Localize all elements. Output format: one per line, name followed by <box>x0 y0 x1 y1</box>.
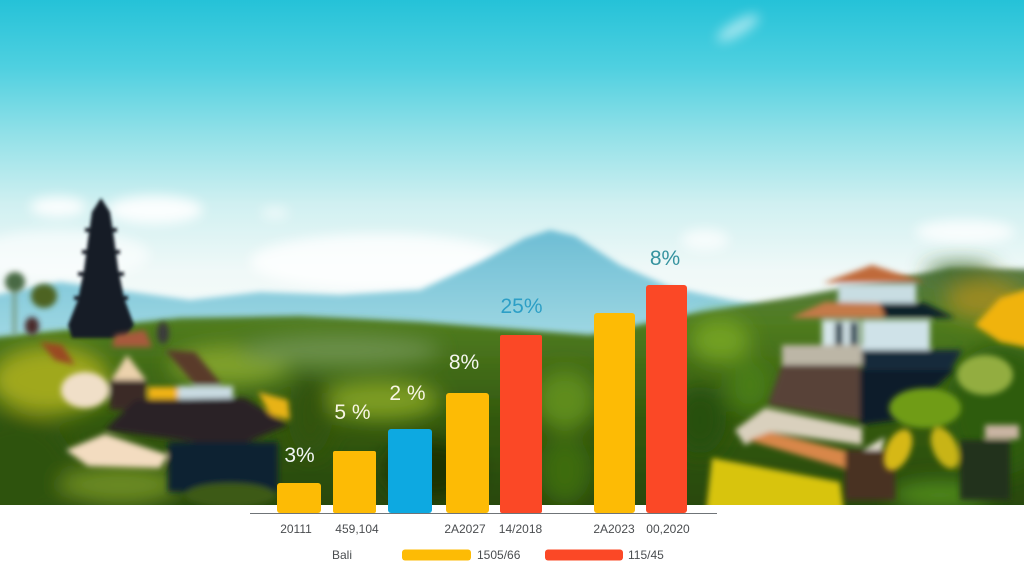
bar 4 yellow <box>446 393 489 513</box>
distant mountains <box>0 226 761 340</box>
axis label 459,104: 459,104 <box>335 522 379 536</box>
palm trees left <box>5 272 169 344</box>
pagoda tower <box>68 198 134 338</box>
bar 1 yellow <box>277 483 321 513</box>
bar chart <box>250 247 717 536</box>
axis label 00,2020: 00,2020 <box>646 522 690 536</box>
value label 8% top: 8% <box>650 247 680 270</box>
axis label 14/2018: 14/2018 <box>499 522 543 536</box>
bar 5 red <box>500 335 542 513</box>
sky <box>0 0 1024 302</box>
legend swatch red <box>545 550 623 560</box>
value label 25%: 25% <box>500 295 543 318</box>
legend label yellow: 1505/66 <box>477 548 521 562</box>
right palm and rice field <box>705 355 1019 520</box>
left temple compound <box>40 330 290 507</box>
bar 2 yellow <box>333 451 376 513</box>
right building <box>735 265 962 500</box>
green hills <box>0 264 1024 505</box>
axis label 20111: 20111 <box>280 522 312 536</box>
bar 7 red <box>646 285 687 513</box>
value label 8%: 8% <box>449 351 479 374</box>
foliage blobs <box>0 264 1024 525</box>
clouds <box>0 10 1015 290</box>
axis label 2A2023: 2A2023 <box>593 522 635 536</box>
legend title: Bali <box>332 548 352 562</box>
value label 5%: 5 % <box>334 401 371 424</box>
legend label red: 115/45 <box>628 548 664 562</box>
golden hillside <box>975 285 1024 350</box>
bar 6 yellow <box>594 313 635 513</box>
value label 2%: 2 % <box>389 382 426 405</box>
legend <box>332 548 664 562</box>
legend swatch yellow <box>402 550 471 560</box>
value label 3%: 3% <box>284 444 315 467</box>
bar 3 blue <box>388 429 432 513</box>
axis label 2A2027: 2A2027 <box>444 522 486 536</box>
axis line <box>250 513 717 514</box>
